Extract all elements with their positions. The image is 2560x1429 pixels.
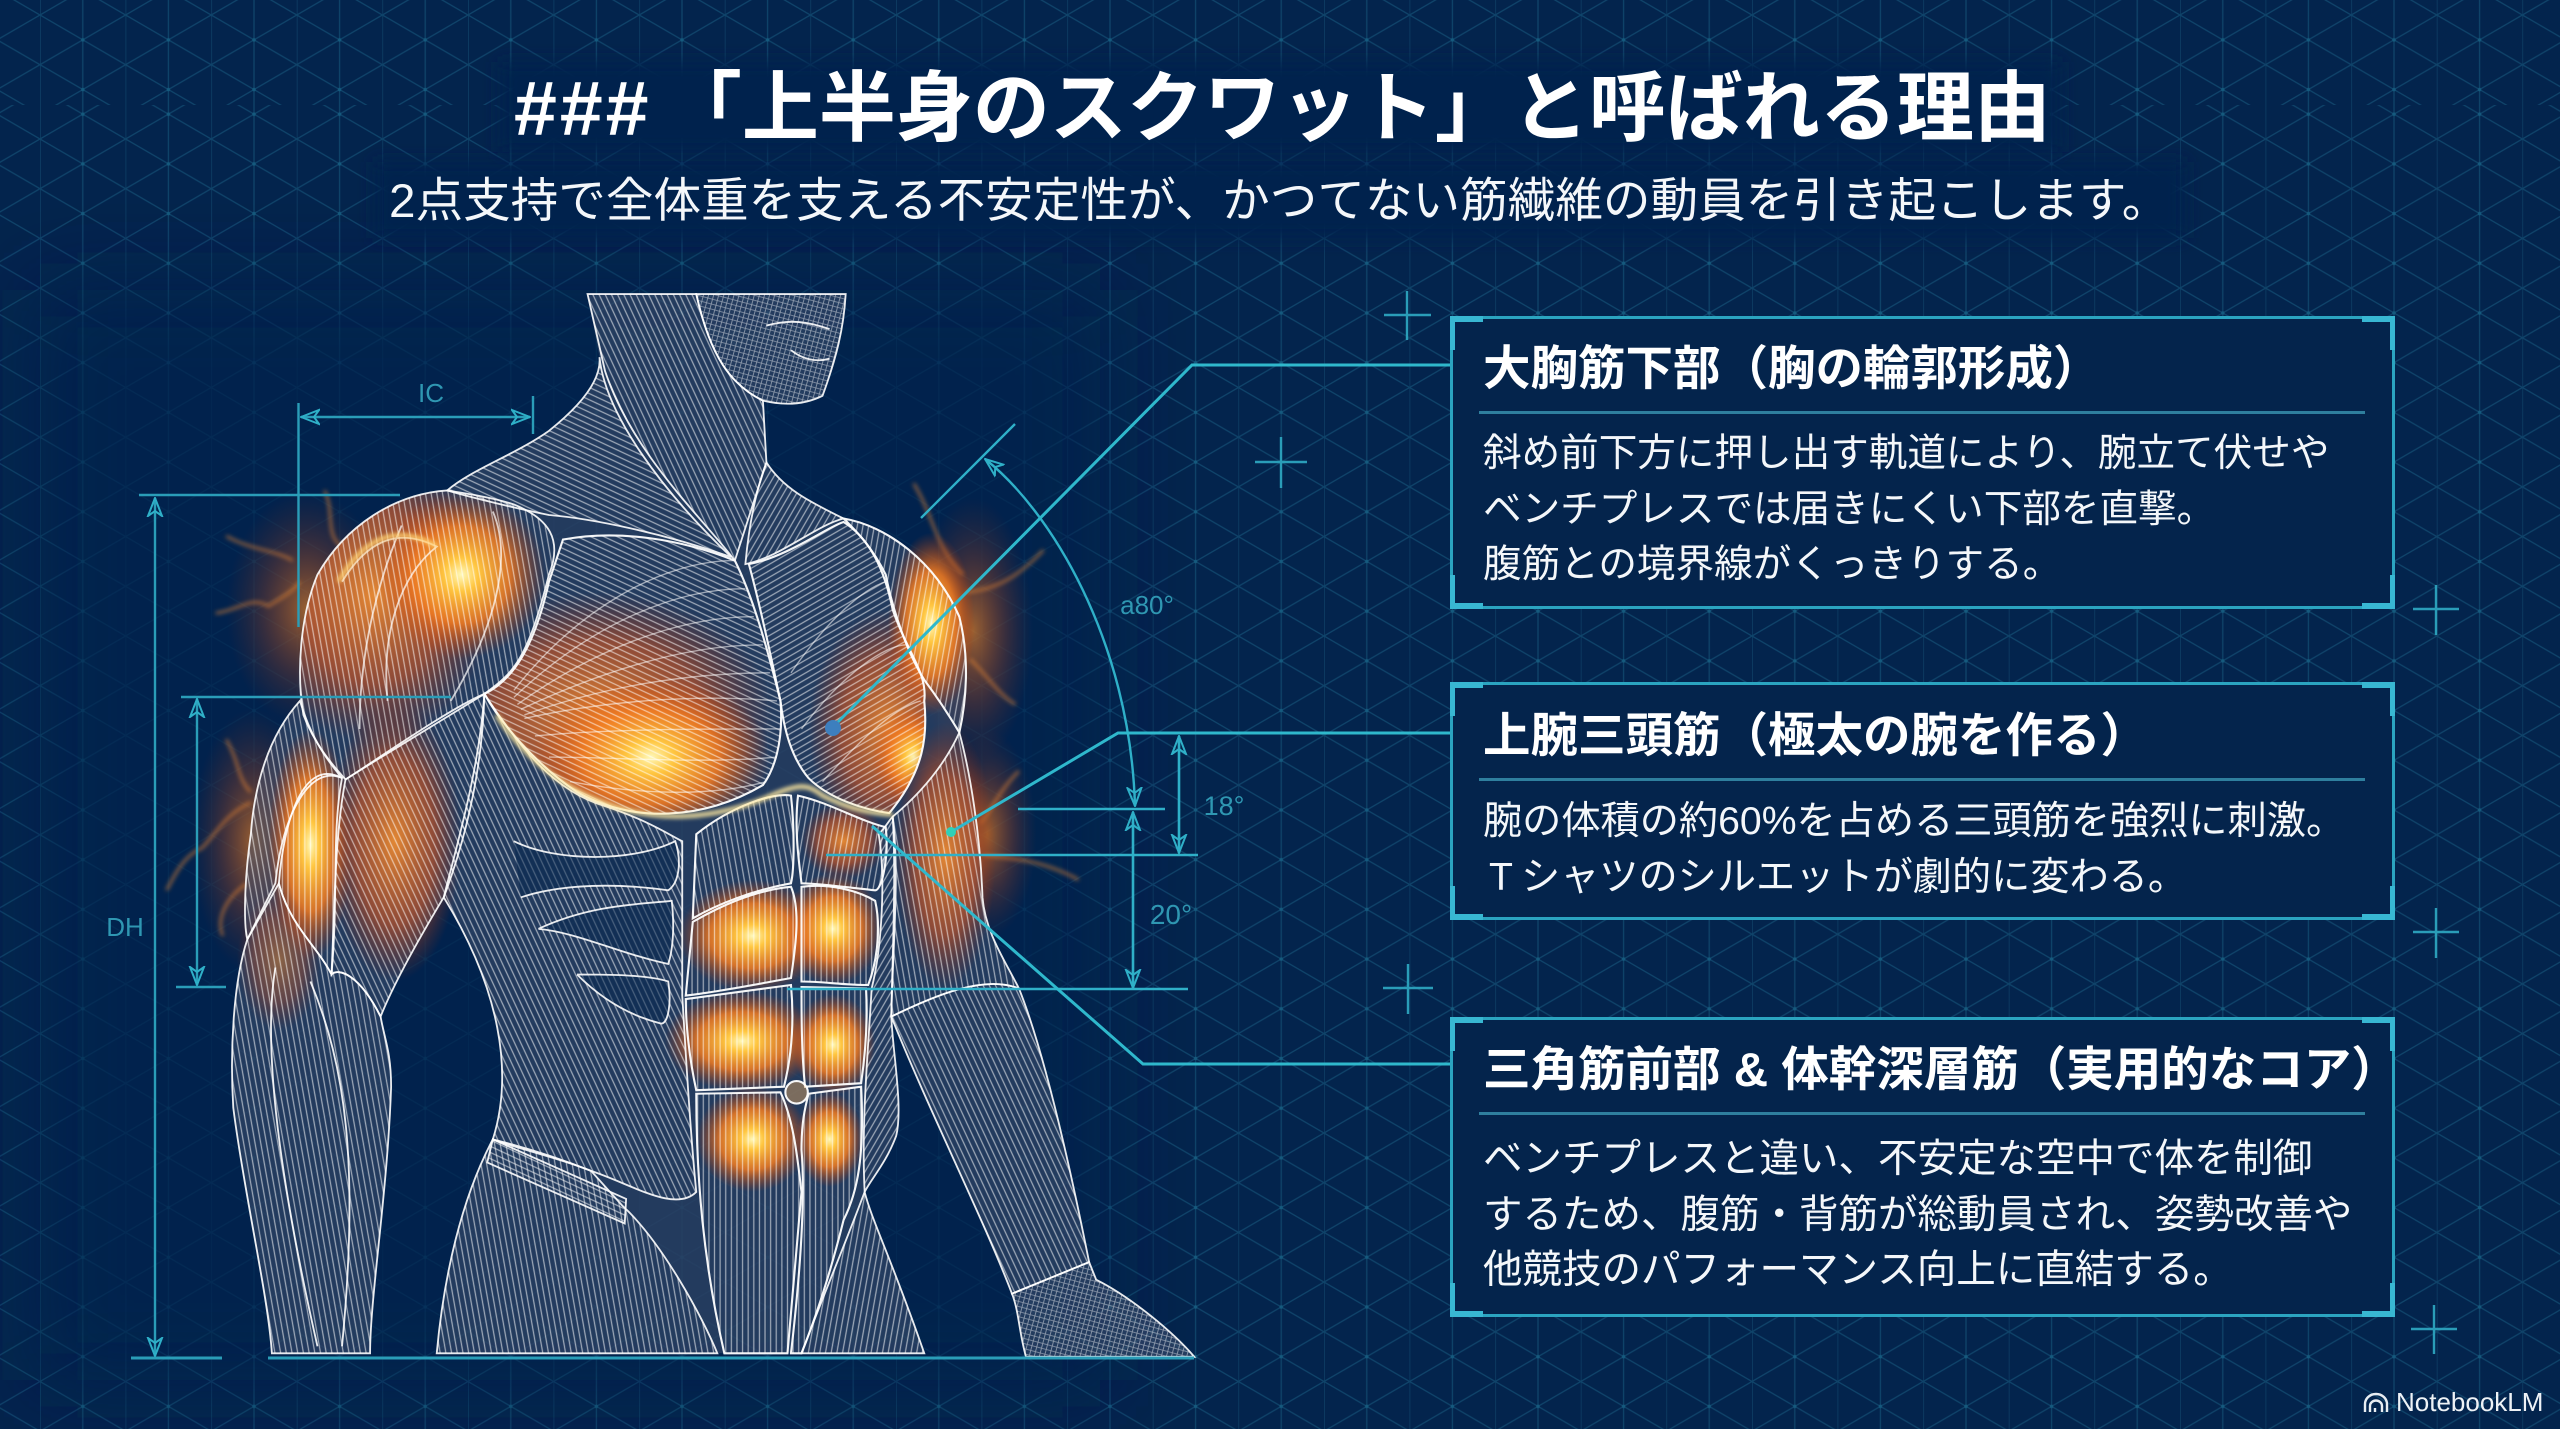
- dimension: shoulder width IC: [139, 396, 533, 627]
- panel heading: lower chest: 大胸筋下部（胸の輪郭形成）: [1483, 343, 2100, 396]
- dimension labels: 20°: [1150, 899, 1192, 930]
- title: ### 「上半身のスクワット」と呼ばれる理由: [514, 66, 2051, 152]
- panel heading: triceps: 上腕三頭筋（極太の腕を作る）: [1483, 710, 2148, 763]
- dimension labels: a80°: [1120, 590, 1174, 620]
- dimension labels: 18°: [1204, 791, 1244, 821]
- callout leader: deltoid and core: [872, 826, 1450, 1064]
- icon: NotebookLM logo: [2364, 1392, 2388, 1412]
- muscle glow: activated regions: [237, 448, 996, 1192]
- callout leader: triceps: [946, 733, 1450, 837]
- muscle fibres: chest: [484, 519, 966, 814]
- anatomical figure: [163, 293, 1196, 1358]
- panel text: lower chest: [1483, 432, 2329, 586]
- muscle fibres: torso and obliques: [437, 694, 924, 1353]
- dimension labels: [106, 378, 1244, 942]
- outer energy halo: [167, 483, 1079, 974]
- muscle fibres: abdominals: [686, 795, 887, 1353]
- panel: triceps: [1450, 682, 2395, 920]
- alignment crosshairs: [1255, 291, 2459, 1354]
- panel text: deltoid and core: 他競技のパフォーマンス向上に直結する。: [1483, 1248, 2233, 1292]
- dimension: right side measures: [787, 736, 1198, 989]
- muscle fibres: left arm and shoulder: [232, 490, 554, 1353]
- muscle fibres: right arm and hand: [891, 732, 1194, 1357]
- panel heading: deltoid and core: 三角筋前部 & 体幹深層筋（実用的なコア）: [1483, 1044, 2399, 1097]
- bright highlight along lower chest: [339, 535, 893, 816]
- dimension: total height DH: [131, 498, 1194, 1358]
- panel text: deltoid and core: [1483, 1137, 2352, 1292]
- panel text: lower chest: 腹筋との境界線がくっきりする。: [1483, 543, 2061, 586]
- dimension labels: IC: [418, 378, 444, 408]
- panel: deltoid and core: [1450, 1017, 2395, 1317]
- panel text: triceps: [1483, 800, 2345, 898]
- dimension: upper arm: [176, 697, 451, 987]
- panel text: triceps: Tシャツのシルエットが劇的に変わる。: [1489, 856, 2187, 898]
- panel text: lower chest: ベンチプレスでは届きにくい下部を直撃。: [1483, 488, 2215, 530]
- muscle fibres: head and neck: [447, 294, 846, 564]
- body silhouette: [232, 294, 1194, 1357]
- panel text: triceps: 腕の体積の約60%を占める三頭筋を強烈に刺激。: [1483, 800, 2345, 843]
- panel: lower chest: [1450, 316, 2395, 609]
- panel text: deltoid and core: ベンチプレスと違い、不安定な空中で体を制御: [1483, 1137, 2312, 1181]
- watermark: NotebookLM: NotebookLM: [2396, 1387, 2543, 1417]
- dimension: angle arc: [921, 424, 1135, 806]
- panel text: deltoid and core: するため、腹筋・背筋が総動員され、姿勢改善や: [1483, 1192, 2352, 1236]
- callout leader: lower chest: [825, 365, 1450, 736]
- dimension labels: DH: [106, 912, 144, 942]
- panel text: lower chest: 斜め前下方に押し出す軌道により、腕立て伏せや: [1483, 432, 2329, 475]
- subtitle: 2点支持で全体重を支える不安定性が、かつてない筋繊維の動員を引き起こします。: [389, 175, 2169, 228]
